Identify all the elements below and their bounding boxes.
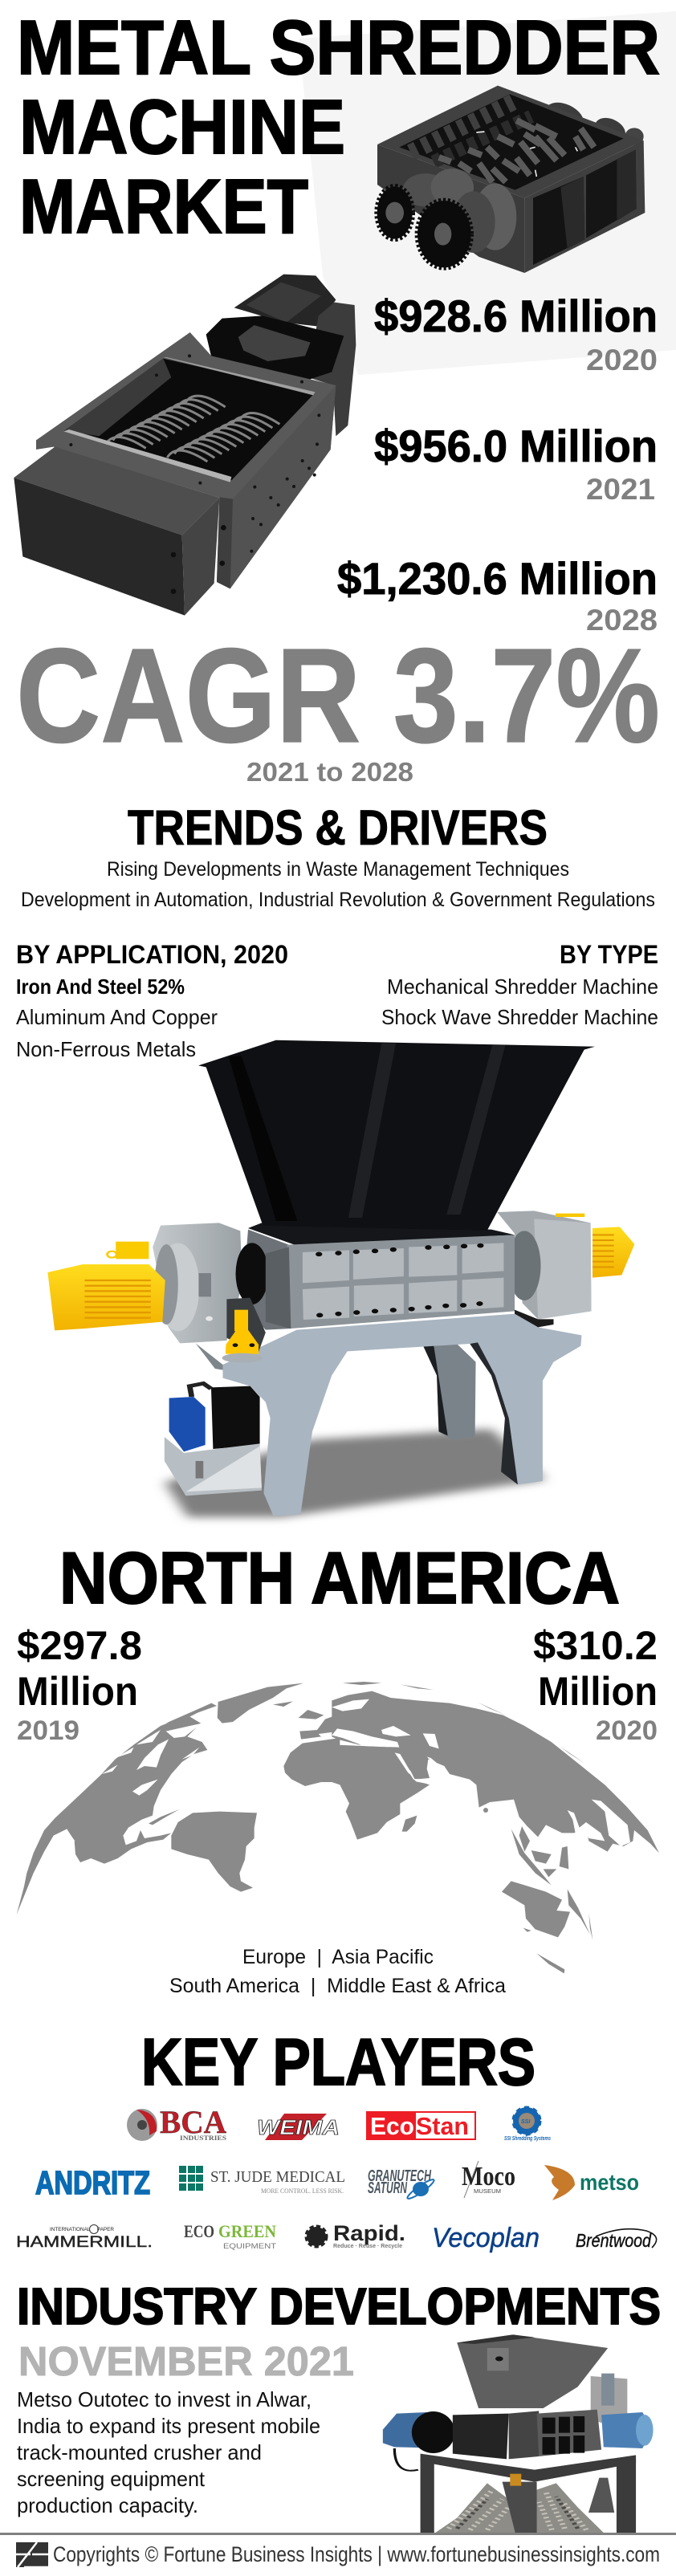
market values — [337, 291, 658, 637]
logo: BCA: BCA — [160, 2104, 226, 2140]
key players heading: KEY PLAYERS — [141, 2025, 536, 2099]
development text: production capacity. — [17, 2493, 198, 2517]
logo: Eco Green Equipment: EQUIPMENT — [223, 2242, 276, 2251]
2019 value: 2019 — [17, 1715, 79, 1746]
logo: Hammermill: HAMMERMILL. — [16, 2234, 153, 2251]
logo: St. Jude Medical: ST. JUDE MEDICAL — [210, 2168, 345, 2186]
trends and drivers — [21, 800, 655, 911]
logo: Brentwood: Brentwood — [576, 2230, 652, 2251]
logo: Eco Green Equipment — [184, 2221, 276, 2251]
2020 value: $310.2 — [533, 1623, 658, 1668]
hopper — [198, 1040, 595, 1231]
logo: Hammermill — [16, 2225, 153, 2251]
logo: BCA — [127, 2104, 227, 2142]
logo: Eco Green Equipment: ECO — [184, 2221, 214, 2241]
2019 value: Million — [17, 1669, 138, 1714]
logo: Rapid: Reduce · Reuse · Recycle — [333, 2244, 402, 2249]
development text: track-mounted crusher and — [17, 2440, 262, 2464]
image: large shredder unit — [14, 275, 356, 616]
title: MACHINE — [19, 84, 345, 170]
other regions: Europe | Asia Pacific — [242, 1946, 434, 1968]
development text: India to expand its present mobile — [17, 2414, 320, 2438]
logo: SSI Shredding Systems — [504, 2107, 551, 2142]
region heading: NORTH AMERICA — [59, 1538, 620, 1619]
CAGR callout: 2021 to 2028 — [246, 757, 413, 787]
footer logo — [16, 2542, 48, 2567]
logo: Moco Museum — [462, 2161, 515, 2198]
2020 value: 2020 — [596, 1715, 658, 1746]
market values: 2021 — [586, 473, 655, 506]
logo: Metso: metso — [580, 2170, 639, 2195]
by type: Mechanical Shredder Machine — [387, 975, 658, 999]
development text — [17, 2387, 320, 2517]
logo: EcoStan — [366, 2111, 476, 2140]
development text: Metso Outotec to invest in Alwar, — [17, 2387, 312, 2411]
by application: Iron And Steel 52% — [16, 975, 185, 999]
other regions — [169, 1946, 506, 1997]
logo: BCA: INDUSTRIES — [180, 2134, 227, 2142]
logo: Granutech Saturn: SATURN — [368, 2179, 407, 2197]
date: NOVEMBER 2021 — [18, 2338, 354, 2384]
map east — [332, 1682, 659, 1973]
logo: Granutech Saturn: GRANUTECH — [368, 2167, 431, 2185]
by application: Non-Ferrous Metals — [16, 1037, 196, 1061]
trends and drivers: TRENDS & DRIVERS — [128, 800, 548, 855]
by type — [381, 940, 658, 1029]
logo: St. Jude Medical — [179, 2166, 345, 2195]
market values: $1,230.6 Million — [337, 553, 658, 604]
logo: Weima: WEIMA — [257, 2115, 340, 2139]
title: MARKET — [19, 164, 308, 250]
by application: BY APPLICATION, 2020 — [16, 940, 288, 969]
2020 value — [533, 1623, 658, 1746]
logo: EcoStan: Stan — [416, 2112, 469, 2140]
image: industrial shredder — [383, 2334, 654, 2533]
world map — [17, 1682, 659, 1973]
logo: Hammermill: INTERNATIONAL PAPER — [50, 2227, 114, 2232]
logo: St. Jude Medical: MORE CONTROL. LESS RISK. — [261, 2187, 344, 2195]
by type: Shock Wave Shredder Machine — [381, 1005, 658, 1029]
logo: Rapid — [307, 2221, 405, 2249]
logo: Eco Green Equipment: GREEN — [218, 2221, 276, 2241]
by application — [16, 940, 288, 1061]
logo: Andritz: ANDRITZ — [35, 2164, 150, 2201]
logo: Moco Museum: Moco — [462, 2162, 515, 2191]
logo: Rapid: Rapid. — [333, 2221, 405, 2245]
footer divider — [0, 2533, 676, 2535]
machine base, motors and frame — [47, 1211, 634, 1517]
image: top shredder unit — [377, 86, 645, 273]
background panel — [299, 11, 676, 375]
trends and drivers: Rising Developments in Waste Management Techniques — [107, 858, 569, 881]
market values: 2020 — [586, 344, 658, 376]
logo: EcoStan: Eco — [370, 2112, 414, 2140]
logo: Vecoplan: Vecoplan — [432, 2223, 540, 2253]
logo: SSI Shredding Systems: SSI — [521, 2119, 531, 2125]
development text: screening equipment — [17, 2467, 206, 2491]
logo: Moco Museum: MUSEUM — [474, 2189, 501, 2195]
by type: BY TYPE — [560, 940, 658, 969]
market values: $928.6 Million — [374, 291, 658, 341]
map west — [17, 1683, 340, 1915]
market values: $956.0 Million — [374, 421, 658, 471]
image: hopper shredder machine — [47, 1040, 634, 1517]
other regions: South America | Middle East & Africa — [169, 1975, 506, 1997]
logo: SSI Shredding Systems: SSI Shredding Systems — [504, 2134, 551, 2142]
by application: Aluminum And Copper — [16, 1005, 218, 1029]
2019 value: $297.8 — [17, 1623, 142, 1668]
2020 value: Million — [538, 1669, 658, 1714]
2019 value — [17, 1623, 142, 1746]
logo: Metso — [544, 2165, 639, 2200]
logo: Granutech Saturn — [368, 2167, 436, 2201]
market values: 2028 — [586, 604, 658, 637]
title — [17, 5, 660, 250]
